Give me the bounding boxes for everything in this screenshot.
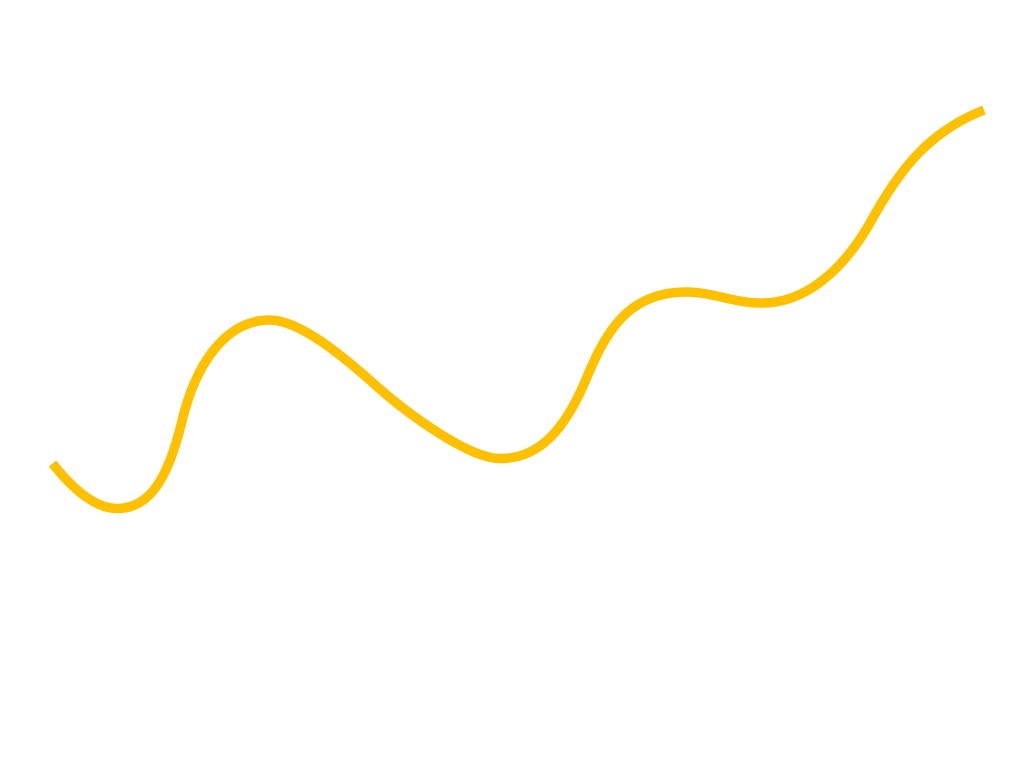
- wavy yellow rising line: [52, 110, 984, 508]
